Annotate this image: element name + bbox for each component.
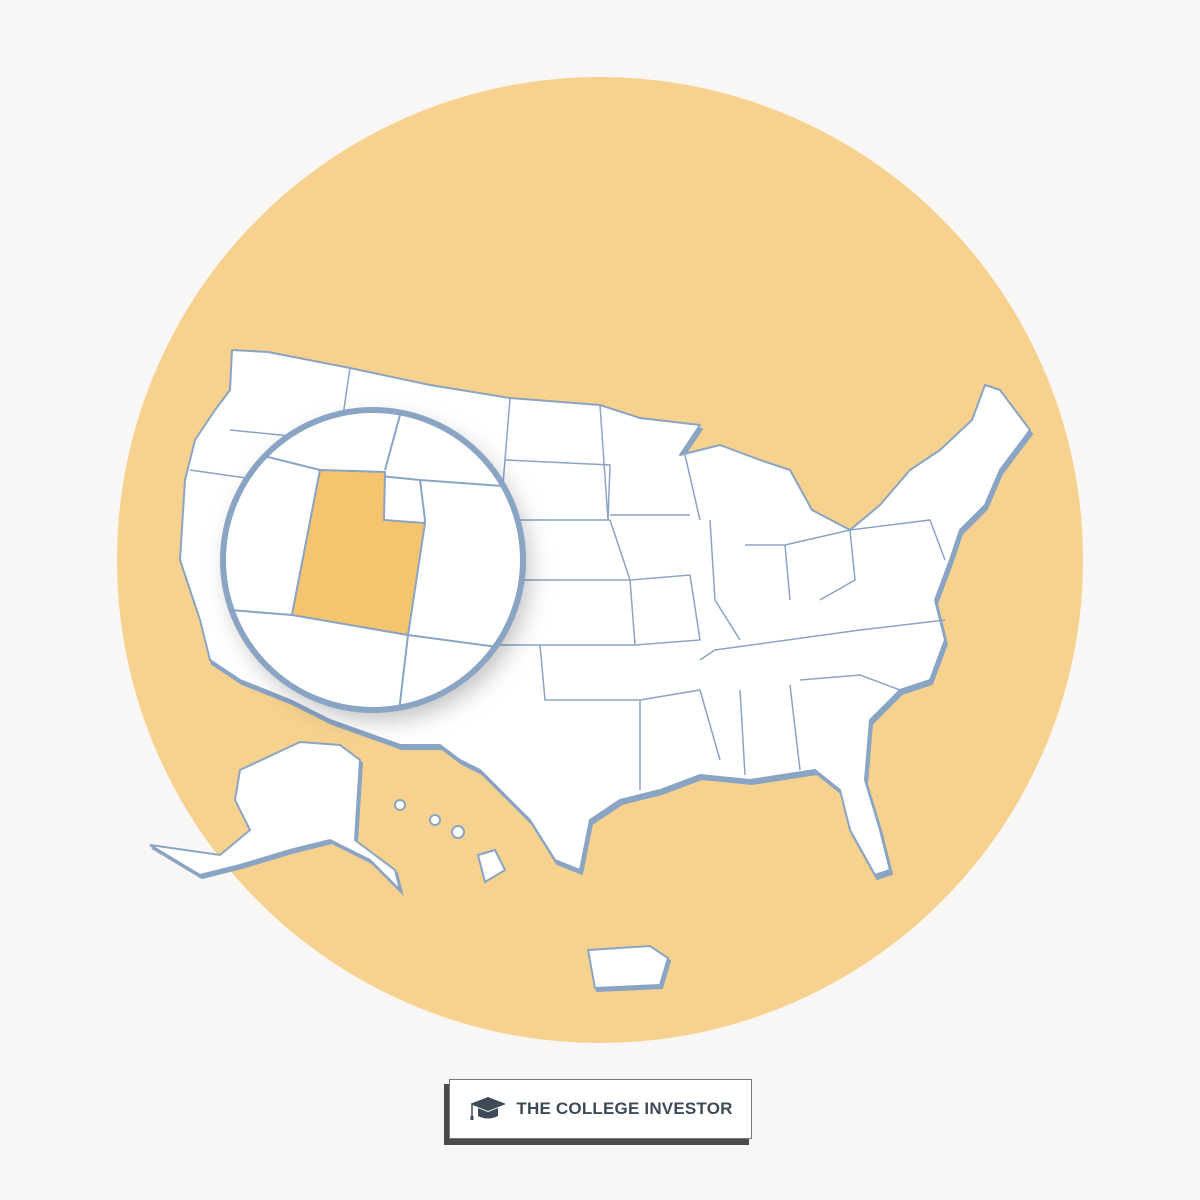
Utah highlighted xyxy=(292,470,425,635)
logo xyxy=(444,1084,749,1145)
map illustration xyxy=(117,77,1083,1043)
icon: graduation cap xyxy=(470,1097,506,1120)
background circle xyxy=(117,77,1083,1043)
Puerto Rico xyxy=(588,946,670,991)
Alaska xyxy=(150,742,402,893)
contiguous US map xyxy=(180,350,1032,879)
magnifier xyxy=(200,410,530,720)
Hawaii xyxy=(395,800,505,882)
state lines xyxy=(190,368,945,790)
text: THE COLLEGE INVESTOR xyxy=(516,1099,733,1118)
